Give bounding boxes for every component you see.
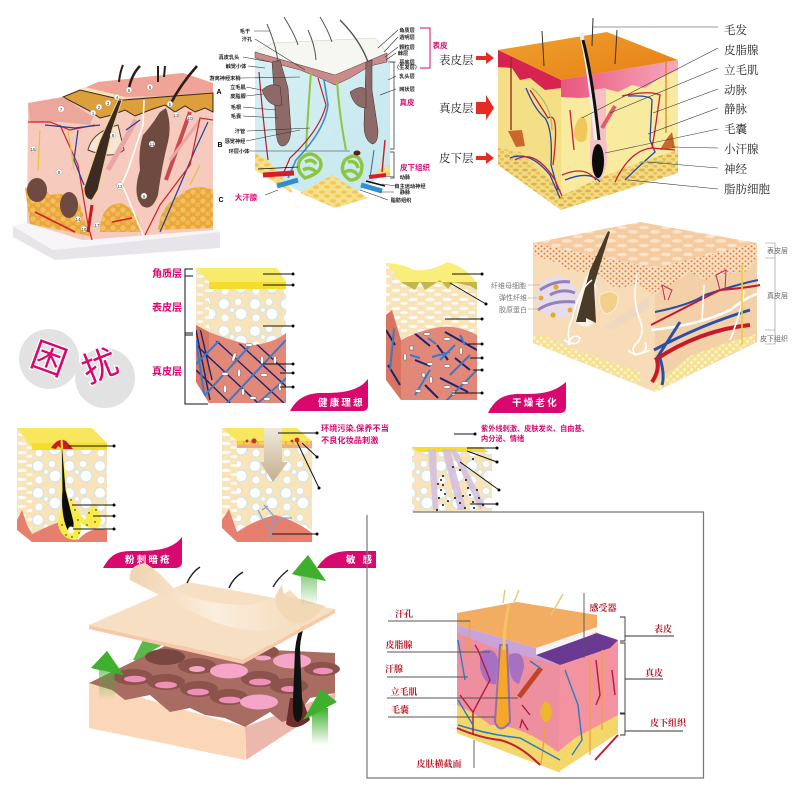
main hair	[581, 33, 604, 178]
layer and part labels: 脂肪组织	[391, 196, 411, 204]
numbered markers: 15	[30, 147, 36, 152]
layer and part labels: 感觉神经	[225, 137, 246, 145]
downward arrow	[260, 428, 288, 482]
layer and part labels: 透明层	[399, 33, 415, 41]
layer labels: 表皮层	[152, 301, 182, 314]
banner: 粉刺暗疮: 粉刺暗疮	[125, 554, 172, 566]
hairs	[267, 17, 368, 62]
layer and part labels: 毛干	[240, 27, 250, 35]
layer and part labels: 颗粒层	[399, 43, 415, 51]
layer and part labels: 汗管	[235, 127, 245, 135]
banner: 敏感	[317, 551, 376, 568]
numbered markers: 9	[143, 194, 146, 199]
layer and part labels: 动脉	[400, 173, 411, 181]
numbered markers: 3	[107, 101, 110, 106]
layer and part labels: 触觉小体	[226, 62, 247, 70]
sheet hairs	[187, 567, 288, 588]
sebaceous gland	[574, 116, 587, 142]
side face	[222, 428, 237, 542]
model body	[27, 73, 213, 240]
badge: 困扰 heading: 困	[26, 335, 72, 384]
yellow irritated line	[238, 442, 310, 444]
fat band	[457, 705, 618, 772]
dermis	[209, 332, 286, 403]
banner: 粉刺暗疮	[103, 537, 182, 568]
sebaceous gland	[480, 650, 524, 684]
left labels: 真皮层	[439, 101, 474, 115]
yellow top	[17, 428, 107, 448]
layer and part labels: 环层小体	[229, 147, 250, 155]
banner: 干燥老化: 干燥老化	[512, 397, 559, 409]
right labels: 静脉	[724, 102, 747, 116]
numbered markers: 8	[58, 170, 61, 175]
layer and part labels: A	[216, 89, 222, 96]
panel: detailed skin cube with collagen inset	[491, 222, 788, 392]
surface hairs	[503, 590, 563, 615]
orange surface	[498, 32, 678, 80]
hairs	[119, 65, 197, 105]
layer and part labels: B	[217, 142, 223, 149]
layer and part labels: 立毛肌	[230, 83, 247, 91]
red cause text: 内分泌、情绪	[481, 434, 524, 443]
fat layer	[498, 148, 678, 210]
labels: 真皮	[645, 667, 663, 678]
red and blue vessels	[457, 640, 618, 765]
right curl	[275, 585, 325, 624]
layer and part labels: 大汗腺	[235, 192, 258, 202]
scaly surface	[533, 222, 757, 268]
labels: 表皮	[654, 623, 672, 634]
pointer lines	[263, 272, 294, 388]
red cause text: 环境污染,保养不当	[321, 423, 389, 433]
bracket lines	[620, 617, 683, 735]
brackets	[390, 28, 430, 178]
light purple band	[457, 625, 560, 665]
vessels	[510, 57, 675, 198]
layer and part labels: 皮下组织	[400, 162, 430, 172]
red cause text	[321, 423, 389, 445]
layer and part labels: C	[218, 197, 224, 204]
layer labels: 真皮层	[152, 365, 182, 378]
sweat glands	[508, 130, 675, 150]
labels: 毛囊	[391, 704, 409, 715]
white strip	[536, 627, 597, 655]
numbered markers: 4	[116, 95, 119, 100]
black particles	[436, 458, 484, 511]
fibroblasts	[222, 343, 282, 401]
dermis	[32, 522, 107, 542]
black comedo dots	[61, 499, 97, 538]
layer labels: 表皮层	[767, 246, 788, 255]
follicles	[262, 60, 378, 146]
olive peeling flakes	[402, 280, 477, 290]
panel: labelled skin section with sweat gland	[209, 17, 448, 208]
block right side	[245, 693, 335, 760]
pointer lines	[68, 444, 116, 530]
right labels: 神经	[724, 162, 747, 176]
white bulb	[68, 526, 74, 534]
dermis side	[386, 310, 401, 400]
skin cube faces	[255, 52, 390, 208]
right labels: 毛囊	[724, 122, 747, 136]
vessels	[259, 72, 385, 178]
skin block	[412, 447, 492, 512]
hair follicle	[84, 100, 122, 200]
leader lines	[240, 30, 398, 200]
panel: UV damage	[412, 424, 589, 512]
fibroblasts and damaged cells	[404, 332, 468, 395]
clogged sebum	[58, 498, 102, 540]
numbered markers: 10	[187, 116, 193, 121]
left labels: 表皮层	[439, 53, 474, 67]
numbered markers: 12	[117, 184, 123, 189]
layer labels	[760, 246, 788, 343]
layer and part labels	[209, 26, 448, 204]
fat at the base	[255, 153, 390, 208]
panel: pores and lifted skin	[89, 555, 340, 760]
pink upper layer	[237, 441, 312, 448]
layer labels: 真皮层	[767, 291, 788, 300]
model display base	[13, 221, 220, 260]
model orange epidermis	[63, 90, 213, 118]
panel: healthy skin	[152, 267, 368, 411]
hair follicle	[495, 605, 510, 728]
green arrows	[91, 555, 337, 745]
layer and part labels: 基底层	[399, 58, 415, 66]
layer labels	[152, 267, 182, 378]
layer bracket	[185, 269, 208, 404]
panel: colour cube with Chinese labels	[439, 18, 770, 210]
sweat duct	[468, 620, 602, 765]
lifted sheet edge	[89, 609, 335, 664]
numbered markers: 7	[60, 107, 63, 112]
labels: 皮脂腺	[385, 639, 413, 650]
red cause text: 紫外线刺激、皮肤发炎、自由基、	[481, 424, 589, 433]
labels: 汗腺	[385, 663, 403, 674]
broken fibres	[386, 327, 477, 400]
right labels: 小汗腺	[724, 142, 759, 156]
net layer	[533, 243, 757, 295]
dermis side	[17, 510, 32, 542]
red spots	[246, 438, 299, 444]
model top surface pink	[80, 73, 213, 97]
receptor	[540, 702, 552, 722]
hair and follicle	[575, 231, 610, 327]
panel: skin model photo	[13, 65, 220, 260]
badge: 困扰 heading	[19, 329, 135, 408]
numbered markers: 5	[128, 88, 131, 93]
layer and part labels: 乳头层	[399, 72, 415, 80]
left labels: 皮下层	[439, 151, 474, 165]
labels: 立毛肌	[390, 686, 418, 697]
blue nerve	[258, 505, 292, 540]
cells	[32, 450, 107, 534]
block front	[89, 683, 245, 760]
numbered markers: 11	[150, 142, 155, 147]
layer and part labels: 棘层	[398, 49, 408, 57]
fat lobes	[25, 185, 213, 236]
right labels: 皮脂腺	[724, 43, 759, 57]
red cause text: 不良化妆品刺激	[321, 435, 378, 445]
panel: sensitive skin	[222, 423, 389, 568]
right face	[558, 640, 618, 772]
pink epidermis wave	[255, 52, 387, 85]
layer and part labels: 毛囊	[231, 112, 241, 120]
layer and part labels: 表皮	[432, 40, 448, 50]
labels: 皮肤横截面	[416, 758, 462, 769]
layer and part labels: 静脉	[400, 188, 411, 196]
dermis	[401, 327, 477, 400]
model cobbled surface	[28, 97, 93, 125]
layer and part labels: 游离神经末梢	[209, 74, 241, 82]
panel: dry ageing skin	[386, 262, 566, 413]
arrector muscle	[602, 106, 615, 128]
labels: 皮下组织	[650, 717, 687, 728]
numbered markers: 13	[173, 113, 179, 118]
leader lines	[387, 593, 584, 768]
front-left face	[457, 625, 560, 772]
sweat ducts	[564, 275, 650, 355]
banner: 干燥老化	[488, 382, 566, 413]
pointer lines	[454, 432, 500, 506]
model cream strip	[78, 87, 125, 102]
inset labels with leaders: 纤维母细胞	[491, 281, 526, 290]
labels	[385, 602, 687, 769]
panel: skin cross-section	[385, 590, 687, 772]
cube faces	[533, 243, 655, 392]
numbered markers: 14	[75, 217, 81, 222]
pointer lines	[272, 432, 320, 536]
cells	[237, 448, 312, 532]
cube faces	[498, 50, 561, 210]
pacinian corpuscle	[354, 150, 360, 156]
brown pore surface	[89, 645, 335, 727]
orange top	[457, 602, 597, 648]
collagen inset	[536, 276, 578, 318]
layer and part labels: 自主运动神经	[394, 182, 426, 190]
dark purple band	[536, 633, 618, 665]
dermis side	[196, 325, 209, 403]
yellow stratum band	[209, 282, 286, 290]
cellular epidermis	[209, 289, 286, 345]
white nerve	[122, 100, 144, 235]
leader lines	[582, 27, 718, 189]
arrector muscle	[519, 668, 541, 697]
layer and part labels: 汗孔	[242, 35, 253, 43]
numbered markers: 16	[81, 227, 87, 232]
right labels: 动脉	[724, 83, 747, 97]
artery and vein tubes	[258, 167, 386, 191]
vessel bundle	[651, 265, 760, 385]
numbered markers	[30, 84, 193, 232]
numbered markers: 8	[112, 133, 115, 138]
labels: 感受器	[589, 602, 617, 613]
layer and part labels: （生发层）	[394, 63, 420, 71]
brackets	[765, 243, 775, 344]
numbered markers: b	[169, 102, 172, 107]
inset labels with leaders	[491, 281, 540, 314]
yellow band	[32, 443, 107, 450]
large hair root	[286, 605, 320, 727]
sweat ducts and coiled glands	[298, 72, 362, 180]
pores	[113, 645, 340, 710]
right labels	[724, 23, 770, 196]
red epidermis wave left	[498, 50, 561, 90]
side face	[17, 428, 32, 542]
cream side face	[196, 268, 209, 340]
fat bottom left	[533, 334, 755, 392]
layer and part labels: 皮脂腺	[230, 92, 247, 100]
left curl	[130, 563, 300, 631]
follicle sheath	[590, 88, 607, 180]
layer and part labels: 真皮	[400, 97, 415, 107]
numbered markers: 17	[94, 223, 100, 228]
layer and part labels: 毛根	[231, 103, 242, 111]
inset labels with leaders: 弹性纤维	[499, 293, 527, 302]
UV rays	[428, 449, 485, 510]
panel: acne skin	[17, 428, 182, 568]
dermis side	[222, 509, 237, 542]
red arrows	[476, 52, 494, 164]
arrector muscles	[108, 112, 200, 180]
labels: 汗孔	[395, 608, 413, 619]
sebaceous gland	[88, 125, 124, 155]
hair	[61, 428, 74, 530]
inset labels with leaders: 胶原蛋白	[499, 305, 527, 314]
red cause text	[481, 424, 589, 443]
pink epidermis wave right	[561, 60, 678, 98]
layer labels: 皮下组织	[760, 334, 788, 343]
top surface grid	[255, 38, 387, 75]
yellow layer	[412, 447, 488, 452]
lifted sheet	[89, 582, 335, 660]
right labels: 立毛肌	[724, 64, 759, 77]
layer and part labels: 角质层	[399, 26, 415, 34]
layer and part labels: 真皮乳头	[219, 53, 239, 61]
sebaceous gland and muscle	[600, 292, 650, 330]
collagen mesh	[196, 329, 286, 403]
dermis	[237, 515, 312, 542]
yellow top	[196, 268, 286, 282]
pointer lines	[445, 272, 488, 394]
small hairs	[542, 18, 617, 66]
vessels	[28, 118, 213, 240]
numbered markers: 2	[98, 105, 101, 110]
yellow top	[222, 428, 312, 441]
side flat cells	[386, 263, 401, 340]
numbered markers: 1	[92, 111, 95, 116]
yellow wavy top	[386, 262, 477, 283]
layer labels: 角质层	[152, 267, 182, 280]
layer and part labels: 网状层	[399, 85, 415, 93]
red pimple	[51, 440, 73, 449]
brown gland and follicle	[27, 108, 170, 218]
banner: 健康理想: 健康理想	[318, 397, 365, 409]
banner: 健康理想	[290, 379, 368, 411]
right labels: 毛发	[724, 23, 747, 37]
frame around cross-section panel	[367, 512, 704, 778]
badge: 困扰 heading: 扰	[77, 342, 124, 391]
left labels	[439, 53, 474, 165]
numbered markers: 6	[149, 85, 152, 90]
flat-cell epidermis	[401, 283, 477, 340]
right labels: 脂肪细胞	[724, 182, 770, 196]
banner: 敏感: 敏 感	[346, 554, 374, 566]
green arrow behind sheet	[133, 640, 162, 662]
